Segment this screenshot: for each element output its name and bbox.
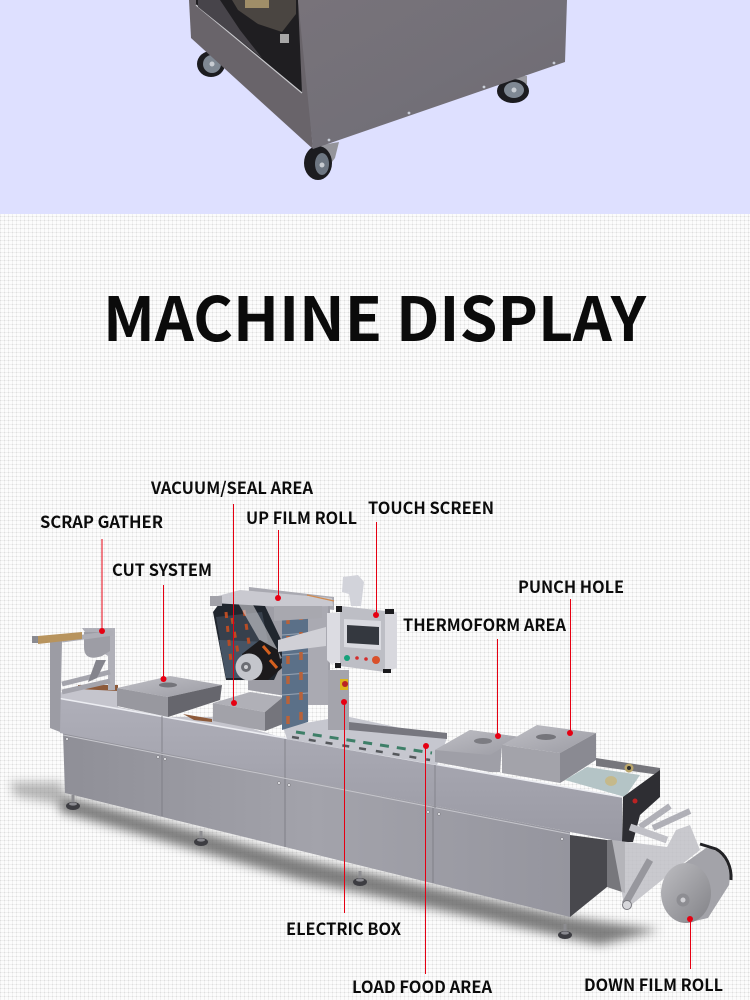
caster: centre — [304, 142, 339, 180]
background: dotted mesh section — [0, 214, 750, 1000]
touch screen control box — [327, 575, 397, 673]
callout: punch hole — [567, 599, 573, 736]
thermoform box — [435, 730, 520, 772]
levelling feet — [66, 795, 572, 939]
screen — [344, 619, 381, 650]
cabinet left face — [189, 0, 313, 149]
callout: electric box — [341, 699, 347, 913]
label: thermoform area: THERMOFORM AREA — [403, 612, 566, 636]
cabinet front face — [298, 0, 567, 149]
label: touch screen: TOUCH SCREEN — [368, 495, 494, 519]
callout: vacuum seal area — [231, 504, 237, 706]
label: load food area: LOAD FOOD AREA — [352, 974, 492, 998]
cabinet window — [196, 0, 302, 93]
floor shadow — [60, 795, 660, 945]
down film roll — [661, 844, 731, 923]
film wheel with wrap — [236, 640, 282, 680]
caster: left — [197, 51, 225, 77]
cabinet rivets — [328, 62, 555, 141]
callout: up film roll — [275, 530, 281, 601]
scrap gather frame — [32, 628, 115, 732]
emergency stop — [340, 679, 348, 690]
electric box column — [328, 670, 349, 730]
label: punch hole: PUNCH HOLE — [518, 574, 624, 598]
callout: touch screen — [373, 522, 379, 618]
label: up film roll: UP FILM ROLL — [246, 505, 357, 529]
label: down film roll: DOWN FILM ROLL — [584, 972, 723, 996]
background: lavender top band — [0, 0, 750, 214]
callout: cut system — [160, 585, 166, 682]
machine end side panel — [570, 835, 607, 917]
down film and rollers — [612, 806, 700, 910]
title: MACHINE DISPLAY — [103, 270, 647, 359]
callout: down film roll — [687, 916, 693, 969]
upper deck panel — [57, 698, 622, 842]
up film printed strip — [282, 607, 308, 730]
callout lines and dots — [99, 504, 693, 974]
label: vacuum/seal area: VACUUM/SEAL AREA — [150, 475, 313, 499]
left floor shadow — [10, 782, 66, 806]
punch hole box — [502, 725, 596, 783]
upper film dark web — [213, 600, 287, 680]
label: scrap gather: SCRAP GATHER — [40, 509, 163, 533]
cut system box — [117, 676, 222, 717]
top film rail with clamps — [210, 590, 334, 652]
deck surface — [57, 685, 340, 750]
machine cabinet bottom with casters — [189, 0, 567, 180]
callout: thermoform area — [495, 639, 501, 739]
vacuum seal box — [213, 692, 283, 731]
label: electric box: ELECTRIC BOX — [286, 916, 402, 940]
conveyor load area — [283, 716, 447, 765]
thermoforming machine illustration — [10, 575, 731, 945]
label: cut system: CUT SYSTEM — [112, 557, 212, 581]
lower cabinet panels — [63, 733, 570, 917]
callout: load food area — [423, 743, 429, 974]
machine end conveyor — [565, 758, 660, 842]
control buttons — [344, 655, 380, 664]
handle roller — [32, 632, 82, 644]
film back plate — [248, 587, 334, 705]
caster: right — [497, 76, 529, 103]
callout: scrap gather — [99, 539, 105, 634]
